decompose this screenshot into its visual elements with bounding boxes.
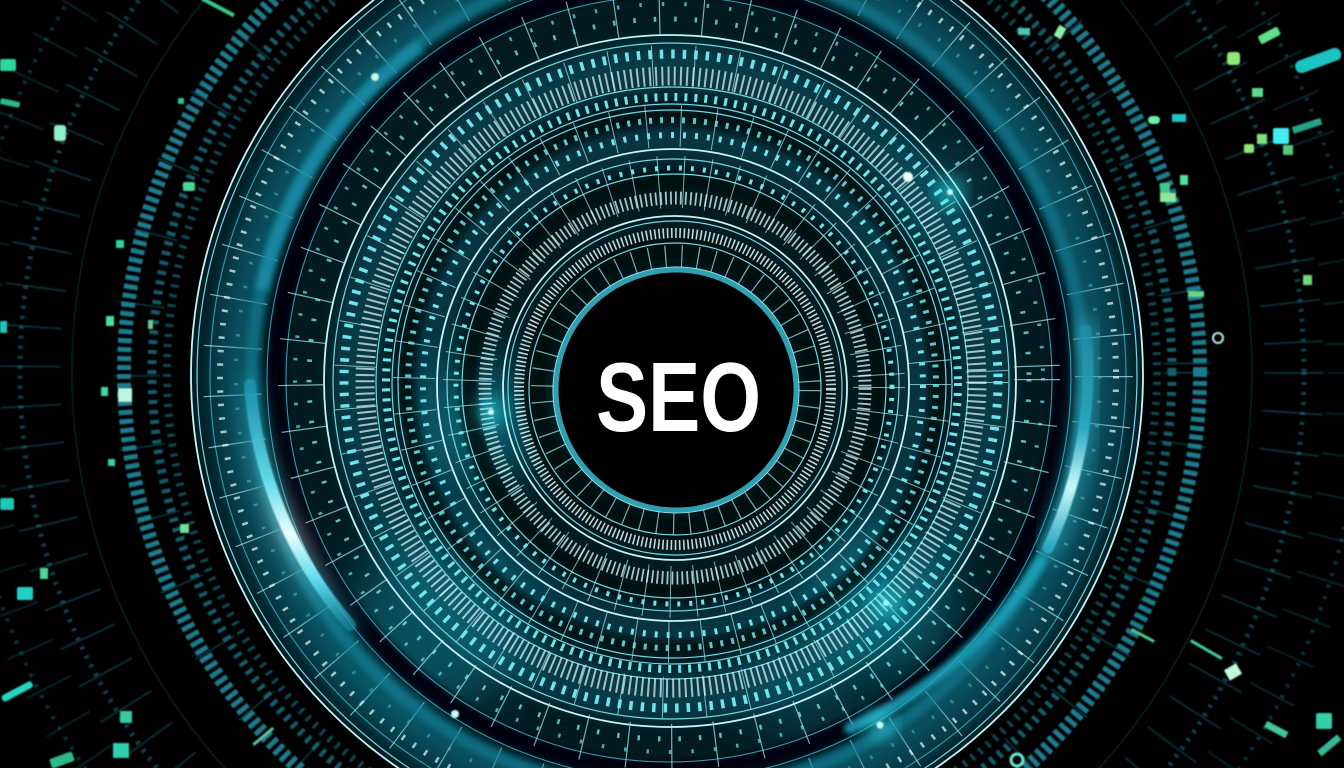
bright arc: lower right	[850, 562, 1040, 728]
bright arc: lower left	[250, 385, 350, 625]
bright arc: upper left	[262, 46, 420, 290]
center ring	[553, 267, 799, 513]
bright arc: right side	[1048, 330, 1088, 548]
full teal arc	[244, 0, 1092, 768]
dense tick rings	[220, 0, 1116, 768]
dark disc with teal glow bands	[191, 0, 1143, 768]
title: SEO: SEO	[596, 342, 761, 452]
scattered green and cyan particles: right	[1011, 25, 1343, 766]
scattered green and cyan particles: left	[0, 0, 274, 768]
main ring lines	[191, 0, 1143, 768]
dark bands between rings	[276, 0, 1062, 768]
radial spokes	[232, 0, 1104, 768]
glow points	[371, 73, 964, 739]
